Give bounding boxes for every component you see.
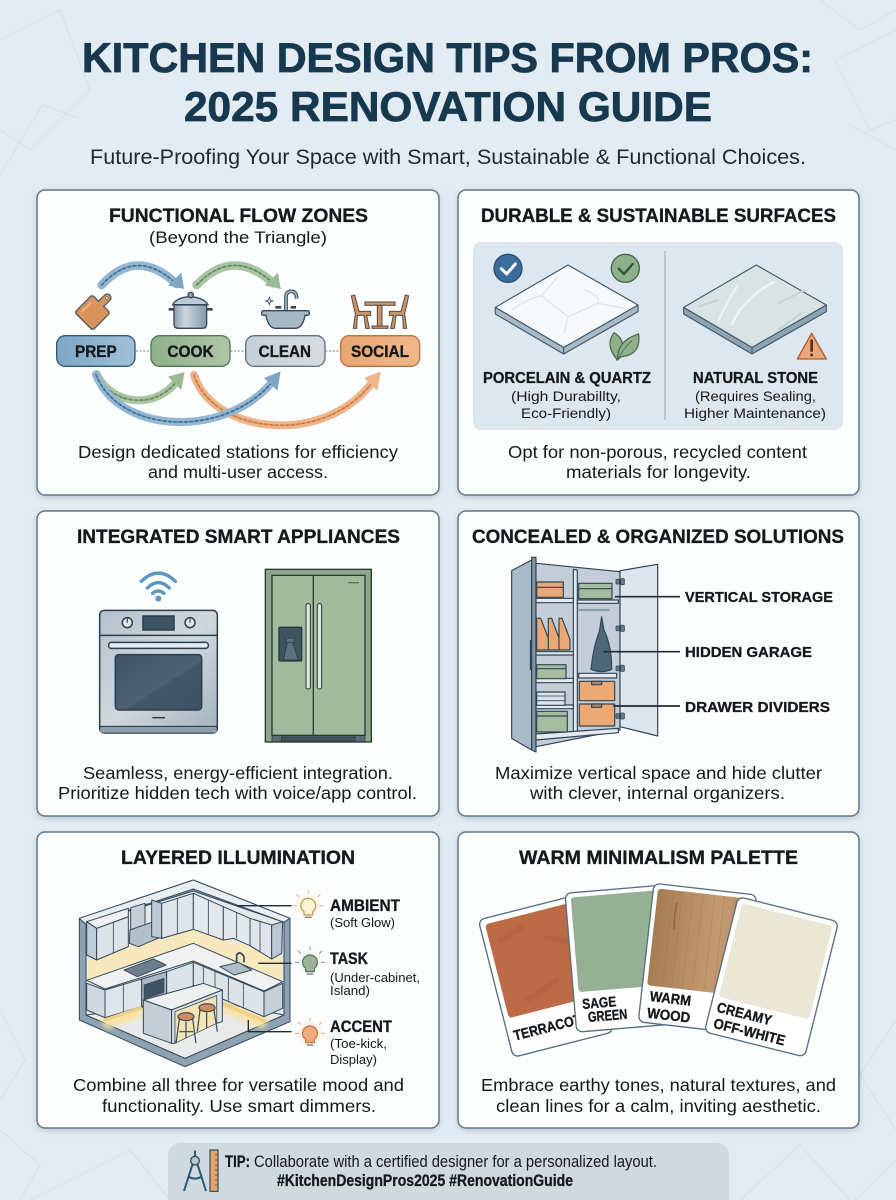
caption: solutions: Maximize vertical space and hide clutter	[495, 763, 822, 783]
label: accent: Display)	[330, 1052, 377, 1067]
caption: appliances: Prioritize hidden tech with voice/app control.	[58, 783, 417, 803]
swatch: warm wood: WARM	[649, 989, 692, 1010]
label: drawer dividers: DRAWER DIVIDERS	[685, 699, 830, 716]
leader lines	[237, 906, 292, 1032]
label: natural stone	[684, 370, 826, 421]
label: ambient: (Soft Glow)	[330, 915, 395, 930]
caption: appliances: Seamless, energy-efficient integration.	[83, 763, 393, 783]
arrow: prep to cook	[102, 266, 184, 289]
label: task: Island)	[330, 983, 370, 998]
swatch: creamy off-white	[704, 897, 839, 1057]
swatch: sage green: GREEN	[587, 1007, 628, 1026]
heading: surfaces: DURABLE & SUSTAINABLE SURFACES	[481, 206, 836, 227]
label: ambient: AMBIENT	[330, 897, 400, 915]
heading: solutions: CONCEALED & ORGANIZED SOLUTIONS	[472, 527, 844, 548]
subheading: (Beyond the Triangle)	[149, 228, 327, 247]
slab: natural stone	[684, 265, 826, 354]
label: porcelain and quartz: Eco-Friendly)	[521, 405, 611, 421]
label: ambient	[330, 897, 400, 930]
caption: palette: Embrace earthy tones, natural textures, and	[481, 1075, 836, 1095]
hashtags: #KitchenDesignPros2025 #RenovationGuide	[277, 1171, 573, 1190]
caption: illumination: functionality. Use smart dimmers.	[102, 1096, 376, 1116]
arrow: cook to social	[194, 371, 381, 425]
pill: cook	[151, 336, 230, 366]
title: 2025 RENOVATION GUIDE	[184, 83, 712, 130]
label: natural stone: Higher Maintenance)	[684, 405, 826, 421]
icon: leaf	[610, 333, 639, 360]
arrow: prep to clean	[96, 371, 281, 422]
drawers	[579, 681, 615, 726]
subtitle: Future-Proofing Your Space with Smart, Sustainable & Functional Choices.	[90, 146, 806, 169]
slab: porcelain and quartz	[495, 265, 638, 354]
panel: integrated smart appliances	[37, 511, 439, 816]
caption: illumination	[73, 1075, 404, 1116]
label: porcelain and quartz: PORCELAIN & QUARTZ	[483, 370, 651, 387]
icon: task bulb	[295, 947, 325, 976]
icon: warning	[797, 333, 826, 359]
caption: surfaces: Opt for non-porous, recycled content	[508, 442, 807, 462]
pill: cook: COOK	[167, 343, 214, 361]
swatch: terracotta: TERRACOTTA	[512, 1008, 598, 1045]
label: accent: (Toe-kick,	[330, 1036, 387, 1051]
caption: solutions	[495, 763, 822, 803]
caption: illumination: Combine all three for versatile mood and	[73, 1075, 404, 1095]
arrow: cook to clean	[197, 265, 281, 289]
label: vertical storage: VERTICAL STORAGE	[685, 589, 833, 606]
icon: ambient bulb	[293, 890, 323, 919]
icon: table and chairs	[351, 295, 409, 328]
hanging bag	[591, 617, 612, 672]
caption: flow zones: and multi-user access.	[148, 462, 328, 482]
pill: prep: PREP	[75, 343, 117, 361]
pill: clean: CLEAN	[259, 343, 311, 361]
organizer boxes	[537, 582, 612, 732]
illustration: refrigerator	[265, 569, 371, 742]
icon: sink with faucet	[262, 291, 309, 328]
arrow: prep to cook lower	[97, 372, 185, 400]
tip text: TIP:	[225, 1152, 250, 1171]
swatch: creamy off-white: CREAMY	[715, 1000, 774, 1029]
icon: compass and ruler	[184, 1150, 218, 1191]
swatch: warm wood: WOOD	[646, 1006, 691, 1027]
caption: palette	[481, 1075, 836, 1116]
icon: wifi	[141, 573, 175, 602]
label: hidden garage: HIDDEN GARAGE	[685, 644, 812, 661]
swatch: terracotta	[478, 894, 613, 1057]
caption: flow zones	[78, 442, 398, 482]
swatch: creamy off-white: OFF-WHITE	[712, 1016, 787, 1049]
pill: clean	[246, 336, 325, 366]
panel: functional flow zones	[37, 190, 439, 495]
hinges	[616, 579, 624, 719]
label: accent: ACCENT	[330, 1018, 392, 1036]
illustration: oven	[100, 610, 217, 733]
caption: palette: clean lines for a calm, inviting aesthetic.	[496, 1096, 821, 1116]
panel: layered illumination	[37, 832, 439, 1128]
label: natural stone: NATURAL STONE	[693, 370, 818, 387]
icon: pot	[169, 292, 213, 328]
label: porcelain and quartz: (High Durabillty,	[511, 388, 621, 404]
pill: prep	[57, 336, 135, 366]
faucet and sink	[220, 962, 252, 975]
panel: durable and sustainable surfaces	[458, 190, 859, 495]
stools	[176, 1004, 217, 1043]
icon: blue check	[494, 254, 522, 282]
heading: palette: WARM MINIMALISM PALETTE	[519, 848, 798, 869]
toe-kick glow	[104, 1004, 266, 1022]
label: accent	[330, 1018, 392, 1067]
footer tip bar	[168, 1143, 729, 1200]
stove	[124, 959, 166, 977]
island	[143, 983, 222, 1010]
title	[82, 34, 813, 130]
swatch: sage green	[565, 885, 673, 1032]
swatch: sage green: SAGE	[582, 994, 617, 1013]
caption: surfaces	[508, 442, 807, 482]
upper cabinets	[87, 922, 97, 960]
comparison box	[473, 242, 843, 430]
tip text: Collaborate with a certified designer for a personalized layout.	[254, 1152, 657, 1171]
swatch: warm wood	[638, 883, 757, 1033]
caption: flow zones: Design dedicated stations for efficiency	[78, 442, 398, 462]
icon: green check	[611, 254, 639, 282]
backsplash glow	[87, 929, 282, 980]
icon: cutting board	[75, 286, 119, 330]
illustration: open cabinet	[512, 557, 680, 752]
flow diagram	[57, 265, 420, 425]
panel: concealed and organized solutions	[458, 511, 859, 816]
base cabinets	[87, 983, 105, 1018]
caption: solutions: with clever, internal organizers.	[529, 783, 785, 803]
leader lines	[603, 597, 680, 706]
label: porcelain and quartz	[483, 370, 651, 421]
caption: appliances	[58, 763, 417, 803]
heading: illumination: LAYERED ILLUMINATION	[121, 848, 355, 869]
illustration: isometric kitchen	[79, 880, 290, 1067]
title: KITCHEN DESIGN TIPS FROM PROS:	[82, 34, 813, 81]
label: task	[330, 950, 420, 998]
connectors between zones	[136, 349, 340, 352]
label: natural stone: (Requires Sealing,	[695, 388, 816, 404]
caption: surfaces: materials for longevity.	[566, 462, 751, 482]
pill: social	[341, 336, 420, 366]
label: task: TASK	[330, 950, 368, 968]
floor	[86, 987, 284, 1058]
label: task: (Under-cabinet,	[330, 970, 420, 985]
heading: functional flow zones: FUNCTIONAL FLOW ZONES	[109, 206, 368, 227]
heading: appliances: INTEGRATED SMART APPLIANCES	[77, 527, 400, 548]
icon: accent bulb	[295, 1018, 325, 1047]
pill: social: SOCIAL	[351, 343, 409, 361]
counter	[87, 943, 283, 991]
panel: warm minimalism palette	[458, 832, 859, 1128]
